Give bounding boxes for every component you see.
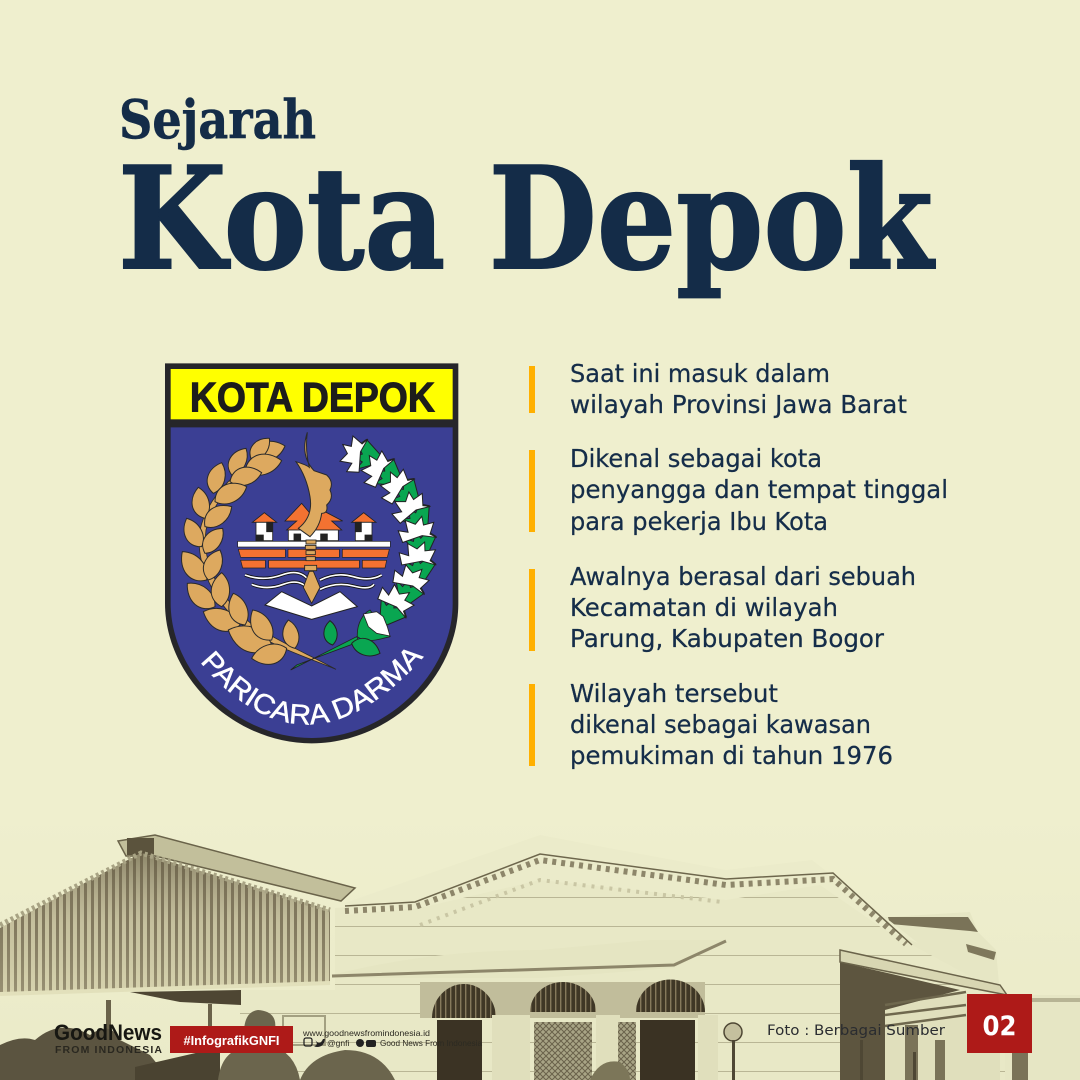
houses — [252, 503, 376, 541]
right veranda wall — [840, 958, 1000, 1080]
left pavilion vent — [118, 835, 355, 901]
platform shadow — [130, 990, 241, 1005]
wordmark: GoodNews — [54, 1020, 162, 1045]
far right wing cornice — [888, 917, 978, 932]
text: pemukiman di tahun 1976 — [570, 741, 893, 770]
accent bar — [529, 450, 535, 532]
tagline: FROM INDONESIA — [55, 1044, 162, 1056]
right veranda rails — [885, 992, 966, 1026]
right veranda awning — [840, 950, 1007, 995]
cotton garland — [291, 432, 441, 670]
central awning roof — [332, 940, 726, 978]
text: Kecamatan di wilayah — [570, 593, 838, 622]
window frame — [283, 1016, 325, 1045]
pen nib — [303, 540, 320, 603]
left pavilion ribbed roof — [0, 853, 330, 994]
hashtag badge — [170, 1026, 293, 1053]
main roof slope — [345, 835, 918, 943]
trees at lower left — [0, 1028, 170, 1080]
text: dikenal sebagai kawasan — [570, 710, 871, 739]
sky — [0, 810, 1080, 1080]
motto arc path — [200, 655, 425, 724]
text: Parung, Kabupaten Bogor — [570, 624, 885, 653]
lamp posts — [724, 1023, 916, 1080]
shed — [135, 1052, 220, 1080]
large cotton flower and stem — [291, 610, 390, 670]
platform eave — [0, 983, 330, 994]
title line: Kota Depok: Kota Depok — [118, 137, 936, 302]
open book — [265, 592, 357, 619]
central awning edge — [332, 941, 726, 976]
left pavilion eave — [0, 853, 330, 925]
accent bar — [529, 684, 535, 766]
main wall — [240, 855, 1005, 1080]
blue field — [171, 427, 453, 738]
website: www.goodnewsfromindonesia.id — [302, 1028, 430, 1038]
faint lower dentils — [420, 880, 722, 925]
icon: youtube — [366, 1040, 376, 1047]
text: Wilayah tersebut — [570, 679, 778, 708]
text: penyangga dan tempat tinggal — [570, 475, 948, 504]
brick wall — [238, 541, 390, 568]
sepia photo: railway station building — [0, 810, 1080, 1080]
central arcade shadow — [420, 982, 705, 1018]
point 1 — [529, 359, 907, 419]
accent bar — [529, 366, 535, 413]
website and social handles — [302, 1028, 482, 1048]
wreath leaves — [174, 433, 302, 669]
point 4 — [529, 679, 893, 770]
point 2 — [529, 444, 948, 536]
columns — [492, 1015, 718, 1080]
hashtag badge: #InfografikGNFI — [184, 1034, 280, 1048]
accent bar — [529, 569, 535, 651]
text: para pekerja Ibu Kota — [570, 507, 828, 536]
emblem: Kota Depok shield — [165, 363, 458, 744]
text: wilayah Provinsi Jawa Barat — [570, 390, 907, 419]
wreath stem — [199, 447, 336, 669]
left pavilion vent dark opening — [127, 838, 154, 855]
shield outline — [165, 363, 458, 743]
yellow name banner — [171, 369, 453, 419]
icon: twitter — [314, 1039, 325, 1047]
far right wing wall — [880, 912, 1080, 1080]
photo credit: Foto : Berbagai Sumber — [767, 1023, 945, 1039]
platform columns — [106, 1000, 212, 1080]
central bushes — [218, 1010, 395, 1080]
arches — [432, 984, 496, 1018]
right veranda dark interior — [840, 962, 960, 1080]
icon: facebook — [356, 1039, 364, 1047]
icon: instagram — [304, 1038, 312, 1046]
flower units — [335, 432, 441, 637]
handle: @gnfi — [327, 1038, 349, 1048]
social name: Good News From Indonesia — [380, 1038, 482, 1048]
page number badge — [967, 994, 1032, 1053]
right veranda posts — [905, 1025, 1028, 1080]
text: Awalnya berasal dari sebuah — [570, 562, 916, 591]
main eave line — [345, 854, 912, 945]
main eave dentils — [345, 860, 906, 944]
text: Dikenal sebagai kota — [570, 444, 822, 473]
text: Saat ini masuk dalam — [570, 359, 830, 388]
motto arc text: PARICARA DARMA — [201, 650, 424, 725]
rice wreath — [174, 433, 336, 669]
river waves — [245, 573, 382, 589]
torch blade — [296, 432, 331, 537]
point 3 — [529, 562, 916, 653]
doors — [437, 1020, 482, 1080]
title — [118, 89, 936, 302]
page number badge: 02 — [982, 1011, 1016, 1042]
brand logo: GoodNews from Indonesia — [54, 1020, 162, 1056]
title line: Sejarah: Sejarah — [119, 89, 316, 151]
banner text: KOTA DEPOK — [190, 373, 435, 420]
far right wing line — [1030, 998, 1080, 1002]
